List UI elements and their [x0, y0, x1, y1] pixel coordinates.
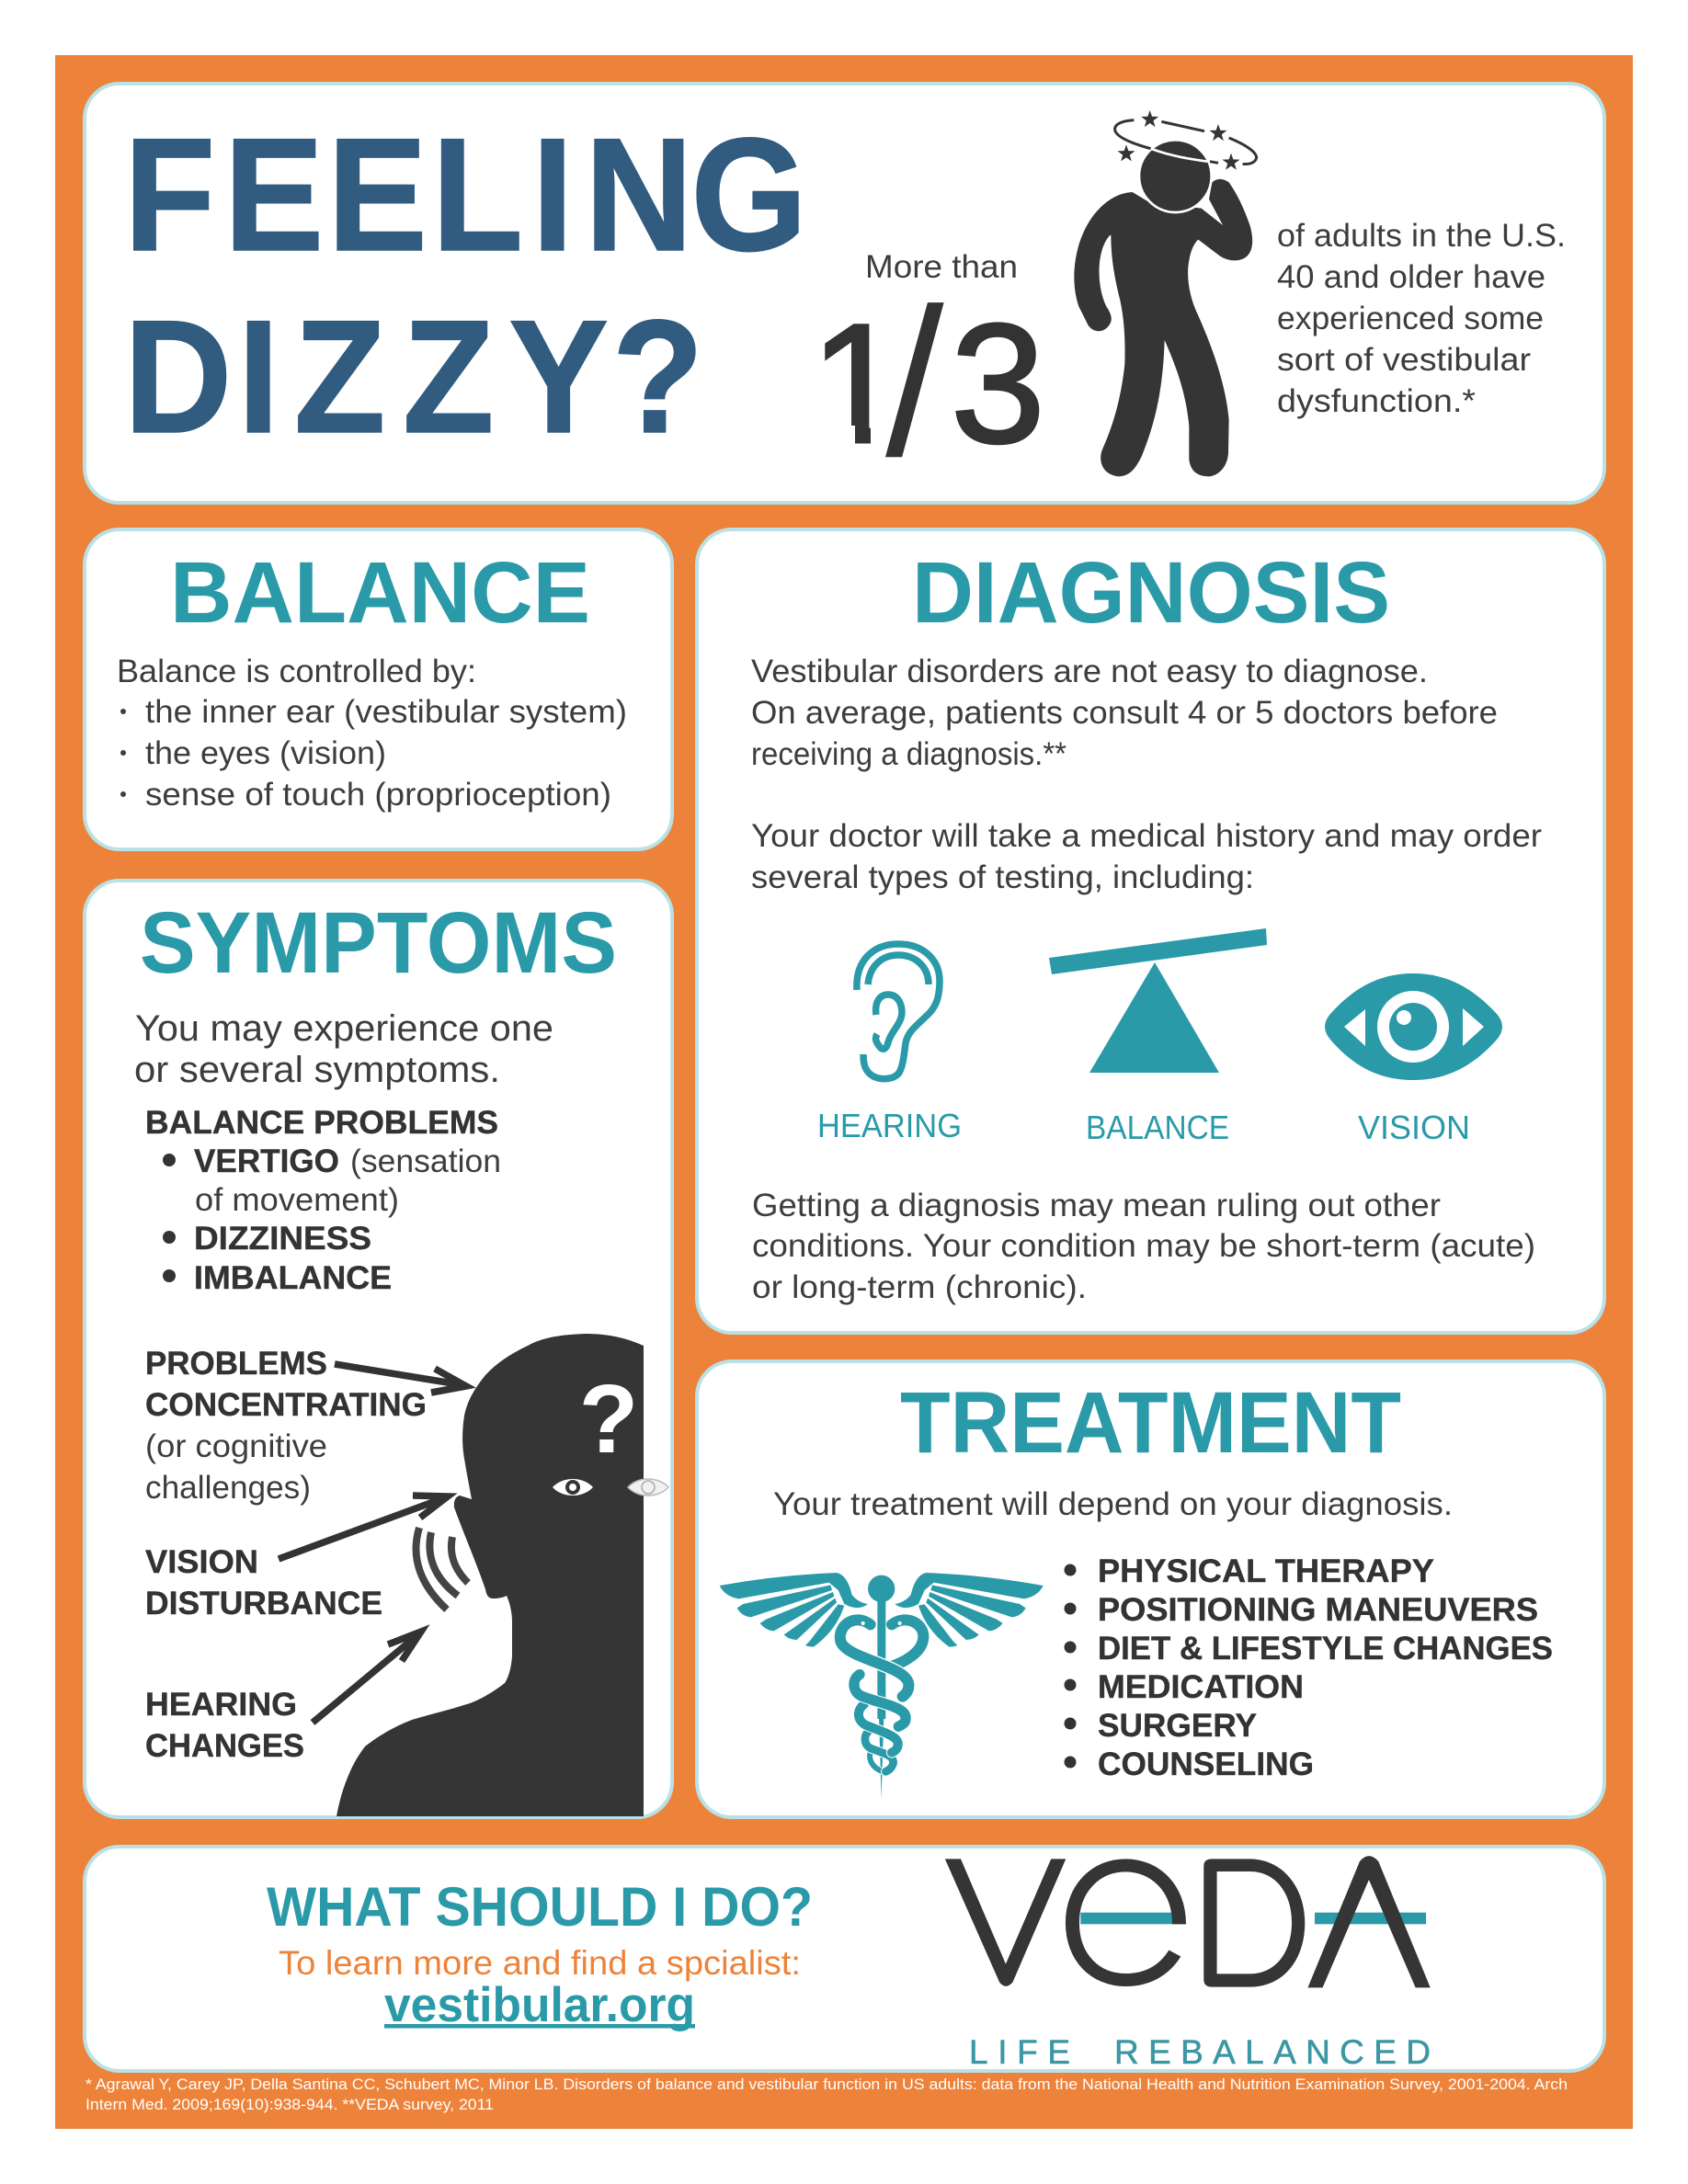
panel: header	[85, 84, 1604, 503]
text: balance controls: Balance is controlled by:	[117, 654, 476, 689]
logo: VEDA	[945, 1856, 1431, 2071]
label: problems concentrating: PROBLEMS	[145, 1346, 327, 1382]
heading: symptoms: SYMPTOMS	[140, 894, 617, 992]
panel: symptoms	[85, 881, 672, 1817]
text: diagnosis intro: On average, patients consult 4 or 5 doctors before	[751, 695, 1498, 731]
text: diagnosis intro: Vestibular disorders are not easy to diagnose.	[751, 654, 1428, 689]
tagline: life rebalanced: LIFE	[969, 2033, 1070, 2071]
footnote	[86, 2076, 1568, 2113]
list: treatment options: POSITIONING MANEUVERS	[1098, 1592, 1538, 1628]
list: balance problems: BALANCE PROBLEMS	[145, 1105, 498, 1141]
text: treatment intro: Your treatment will depend on your diagnosis.	[773, 1486, 1453, 1522]
label: problems concentrating: (or cognitive	[145, 1428, 327, 1464]
statistic description: of adults in the U.S.	[1277, 218, 1566, 254]
icon: eyes	[553, 1479, 668, 1496]
label: balance: BALANCE	[1086, 1109, 1229, 1146]
label: problems concentrating	[145, 1346, 427, 1506]
text: diagnosis intro: Your doctor will take a medical history and may order	[751, 818, 1542, 854]
panel: balance	[85, 529, 672, 849]
title: feeling dizzy: DIZZY?	[124, 287, 703, 466]
panel: diagnosis	[697, 529, 1604, 1333]
list: balance problems: VERTIGO	[194, 1143, 339, 1179]
list: balance problems: DIZZINESS	[194, 1221, 371, 1257]
text: balance controls: the inner ear (vestibular system)	[145, 694, 627, 730]
label: hearing: HEARING	[817, 1107, 962, 1144]
text: learn more: To learn more and find a spcialist:	[279, 1944, 801, 1982]
icon: eye	[1325, 973, 1502, 1080]
label: hearing changes: CHANGES	[145, 1728, 304, 1764]
statistic: more than one third: /	[885, 265, 944, 500]
label: hearing changes: HEARING	[145, 1687, 297, 1723]
text: balance controls	[117, 654, 627, 813]
list: balance problems	[145, 1105, 501, 1296]
icon: ear	[857, 944, 940, 1079]
tagline: life rebalanced	[969, 2033, 1431, 2071]
statistic: more than one third: More than	[865, 249, 1018, 285]
label: problems concentrating: challenges)	[145, 1470, 311, 1506]
list: balance problems: IMBALANCE	[194, 1260, 392, 1296]
label: vision disturbance: VISION	[145, 1544, 258, 1580]
statistic description: experienced some	[1277, 301, 1544, 336]
text: balance controls: sense of touch (proprioception)	[145, 777, 611, 813]
title: feeling dizzy: FEELING	[124, 105, 807, 284]
arrow: to eyes	[279, 1496, 448, 1559]
link: vestibular.org: vestibular.org	[384, 1978, 695, 2032]
list: treatment options: SURGERY	[1098, 1708, 1257, 1744]
statistic: more than one third	[800, 249, 1045, 500]
label: vision: VISION	[1358, 1109, 1470, 1146]
text: symptoms intro: or several symptoms.	[134, 1050, 500, 1090]
statistic description	[1277, 218, 1566, 419]
statistic: more than one third: 1	[810, 290, 905, 479]
arrow: to ear	[313, 1632, 421, 1723]
statistic description: sort of vestibular	[1277, 342, 1531, 378]
text: balance controls: the eyes (vision)	[145, 735, 386, 771]
statistic description: dysfunction.*	[1277, 383, 1476, 419]
heading: treatment: TREATMENT	[900, 1374, 1401, 1472]
list: treatment options: PHYSICAL THERAPY	[1098, 1553, 1434, 1589]
text: diagnosis conclusion: or long-term (chronic).	[752, 1269, 1087, 1305]
text: diagnosis intro: several types of testing, including:	[751, 859, 1254, 895]
footnote: Intern Med. 2009;169(10):938-944. **VEDA survey, 2011	[86, 2096, 494, 2113]
icon: dizzy person	[1074, 110, 1257, 476]
statistic: more than one third: 3	[951, 290, 1045, 479]
text: diagnosis conclusion: Getting a diagnosis may mean ruling out other	[752, 1188, 1441, 1223]
text: diagnosis intro	[751, 654, 1542, 895]
label: vision disturbance: DISTURBANCE	[145, 1586, 382, 1621]
heading: diagnosis: DIAGNOSIS	[912, 544, 1390, 642]
list: treatment options	[1065, 1553, 1553, 1782]
panel: what should I do	[85, 1847, 1604, 2071]
list: treatment options: MEDICATION	[1098, 1669, 1304, 1705]
statistic description: 40 and older have	[1277, 259, 1545, 295]
panel: treatment	[697, 1361, 1604, 1817]
text: symptoms intro: You may experience one	[135, 1008, 553, 1049]
label: vision disturbance	[145, 1544, 382, 1621]
label: problems concentrating: CONCENTRATING	[145, 1387, 427, 1423]
text: diagnosis intro: receiving a diagnosis.**	[751, 736, 1066, 772]
list: treatment options: DIET & LIFESTYLE CHANGES	[1098, 1631, 1553, 1666]
text: diagnosis conclusion: conditions. Your condition may be short-term (acute)	[752, 1228, 1535, 1264]
list: treatment options: COUNSELING	[1098, 1746, 1314, 1782]
icon: question mark: ?	[579, 1365, 638, 1473]
arrow: to head	[335, 1364, 466, 1393]
heading: balance: BALANCE	[170, 544, 590, 642]
tagline: life rebalanced: REBALANCED	[1114, 2033, 1431, 2071]
label: hearing changes	[145, 1687, 304, 1764]
icon: balance scale	[1049, 928, 1267, 1073]
icon: sound waves	[416, 1528, 468, 1610]
icon: caduceus	[720, 1573, 1044, 1799]
illustration: head silhouette	[336, 1334, 668, 1816]
footnote: * Agrawal Y, Carey JP, Della Santina CC, Schubert MC, Minor LB. Disorders of balance and vestibular function in US adults: data from the National Health and Nutrition Examination Survey, 2001-2004. Arch	[86, 2076, 1568, 2093]
heading: what should I do: WHAT SHOULD I DO?	[267, 1876, 813, 1938]
text: symptoms intro	[134, 1008, 553, 1090]
text: diagnosis conclusion	[752, 1188, 1535, 1305]
list: balance problems: (sensation	[350, 1143, 501, 1179]
title: feeling dizzy	[124, 105, 807, 466]
list: balance problems: of movement)	[195, 1182, 399, 1218]
